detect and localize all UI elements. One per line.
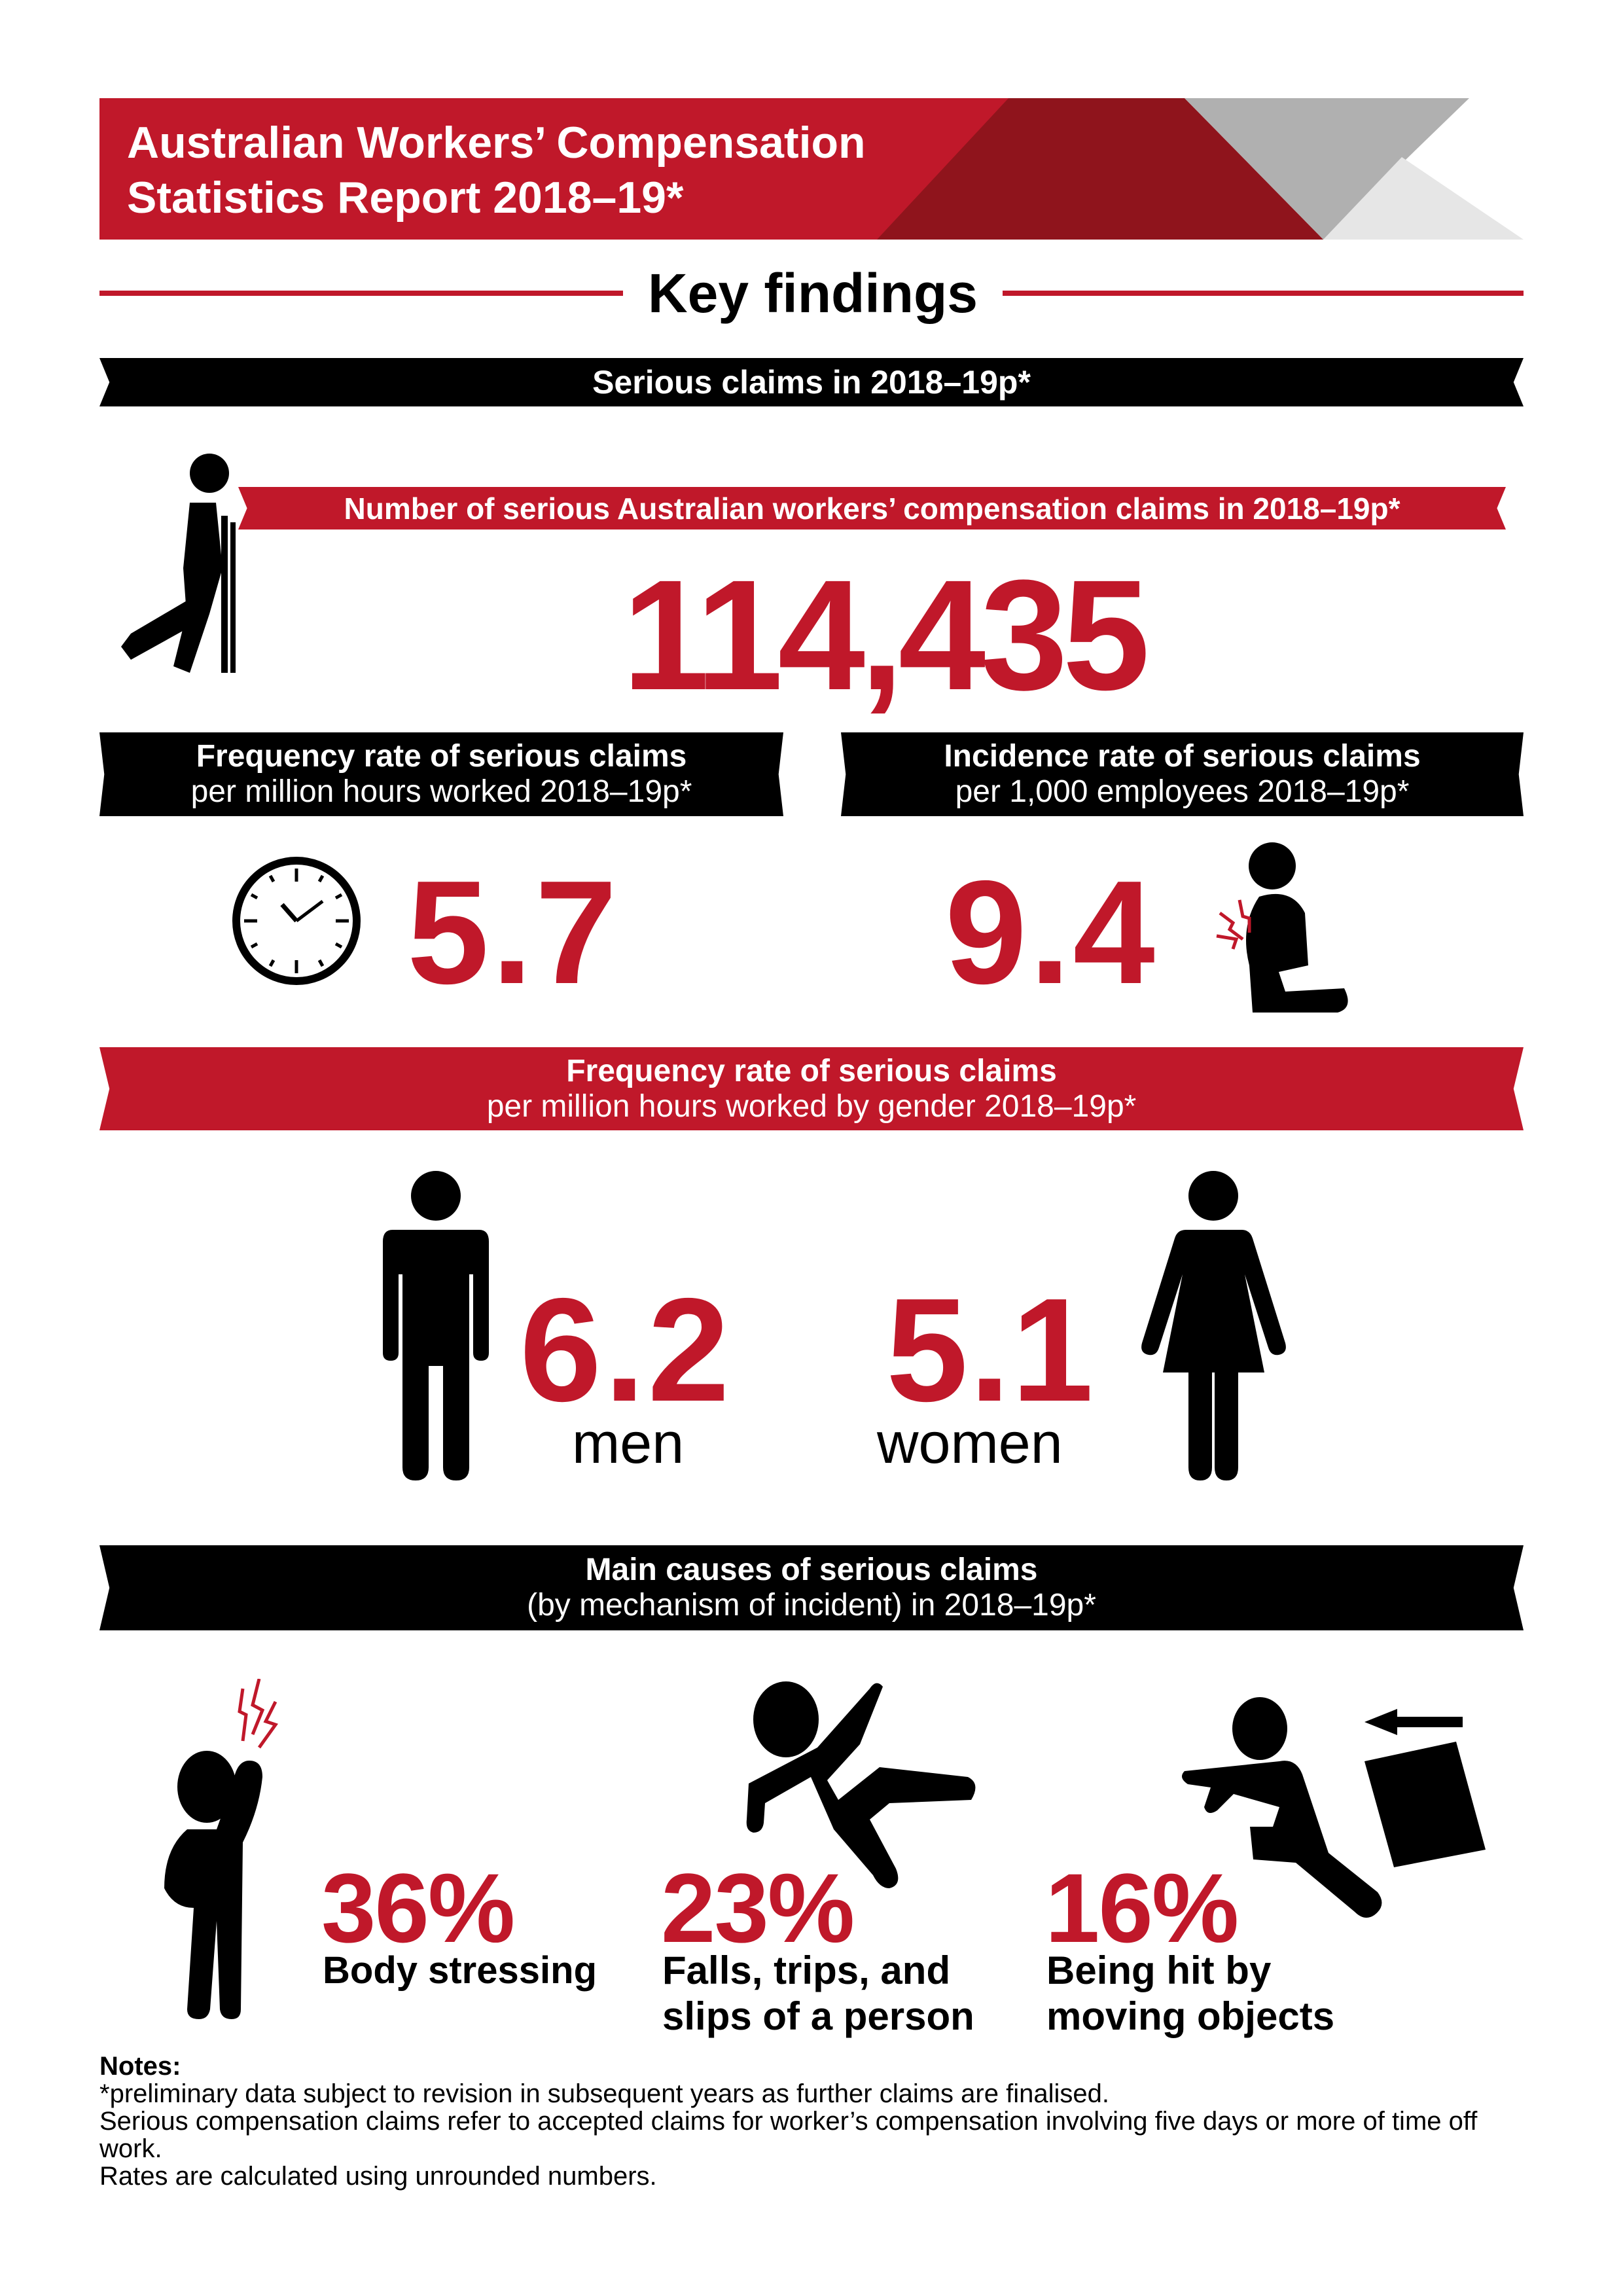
banner: serious claims [99, 358, 1524, 406]
number: 5.7: 5.7 [407, 850, 620, 1014]
number: 5.1 women: 5.1 [886, 1267, 1095, 1432]
banner: main causes [99, 1545, 1524, 1630]
number: 5.1 women: women [877, 1410, 1063, 1475]
title: Australian Workers’ Compensation [127, 118, 866, 168]
stat: 36% body stressing: 36% [321, 1853, 514, 1963]
banner: frequency rate [99, 732, 783, 816]
banner: incidence rate [841, 732, 1524, 816]
banner: incidence rate: Incidence rate of serious claims [944, 739, 1421, 774]
title [127, 118, 866, 223]
stat: 16% hit by moving objects: Being hit by [1046, 1948, 1271, 1992]
stat: 23% falls [661, 1853, 974, 2038]
icon: man [383, 1171, 489, 1480]
icon: falling person [746, 1681, 975, 1888]
banner: frequency rate: per million hours worked 2018–19p* [191, 774, 692, 809]
notes: Notes: [99, 2052, 181, 2081]
stat: 16% hit by moving objects: moving objects [1046, 1994, 1334, 2038]
banner: gender: Frequency rate of serious claims [566, 1054, 1057, 1088]
banner: main causes: Main causes of serious claims [586, 1552, 1037, 1587]
banner: gender [99, 1047, 1524, 1130]
banner: number of serious claims [238, 487, 1506, 529]
header banner [99, 98, 1524, 240]
number: 9.4: 9.4 [945, 850, 1158, 1014]
stat: 23% falls: 23% [661, 1853, 853, 1963]
icon: body stressing [164, 1679, 278, 2019]
banner: main causes: (by mechanism of incident) in 2018–19p* [527, 1588, 1096, 1623]
stat: 16% hit by moving objects: 16% [1045, 1853, 1238, 1963]
icon: hit by moving object [1182, 1697, 1486, 1918]
notes: *preliminary data subject to revision in subsequent years as further claims are finalised. [99, 2079, 1109, 2108]
number: 6.2 men: 6.2 [520, 1267, 732, 1432]
stat: 36% body stressing: Body stressing [323, 1949, 597, 1992]
number: 6.2 men: men [572, 1410, 684, 1475]
title: Statistics Report 2018–19* [127, 173, 683, 223]
icon: woman [1141, 1171, 1286, 1480]
icon: kneeling person in pain [1216, 842, 1348, 1013]
stat: 23% falls: Falls, trips, and [662, 1948, 950, 1992]
banner: gender: per million hours worked by gender 2018–19p* [487, 1089, 1136, 1123]
icon: person with crutches [121, 454, 236, 673]
notes: Serious compensation claims refer to accepted claims for worker’s compensation involving five days or more of time off work. [99, 2107, 1477, 2163]
banner: number of serious claims: Number of serious Australian workers’ compensation claims in 2018–19p* [344, 491, 1400, 525]
stat: 16% hit by moving objects [1045, 1853, 1334, 2038]
heading: key findings: Key findings [648, 262, 978, 324]
icon: clock [232, 857, 361, 985]
heading: key findings [99, 262, 1524, 324]
notes [99, 2052, 1478, 2191]
banner: incidence rate: per 1,000 employees 2018–19p* [955, 774, 1409, 809]
banner: serious claims: Serious claims in 2018–19p* [592, 364, 1031, 401]
number: 114,435: 114,435 [622, 547, 1145, 723]
notes: Rates are calculated using unrounded numbers. [99, 2162, 657, 2191]
stat: 36% body stressing [321, 1853, 597, 1992]
stat: 23% falls: slips of a person [662, 1994, 974, 2038]
banner: frequency rate: Frequency rate of serious claims [196, 739, 687, 774]
